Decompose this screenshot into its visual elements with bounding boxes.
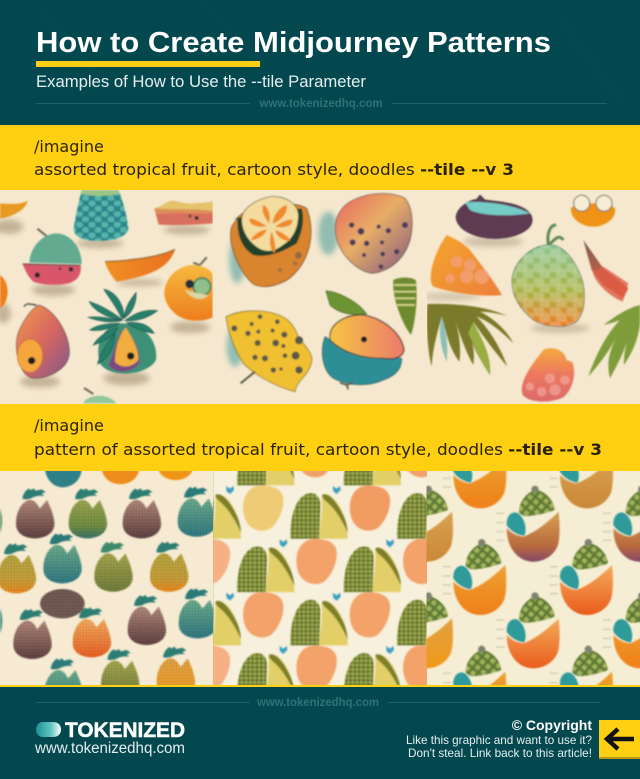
copyright note: Like this graphic and want to use it? bbox=[406, 733, 592, 747]
prompt band 2: /imagine bbox=[34, 416, 104, 435]
image row 1: tropical fruit doodles bbox=[0, 190, 640, 404]
footer band bbox=[0, 685, 640, 779]
prompt band 1: assorted tropical fruit, cartoon style, doodles --tile --v 3 bbox=[34, 160, 514, 179]
pattern 2 bbox=[213, 471, 427, 685]
website label bottom: www.tokenizedhq.com bbox=[256, 697, 379, 709]
website label top: www.tokenizedhq.com bbox=[259, 98, 382, 110]
mottled round fruit bbox=[335, 194, 412, 273]
copyright note bbox=[406, 717, 592, 760]
image 1 bbox=[0, 190, 213, 403]
prompt band 2: pattern of assorted tropical fruit, cartoon style, doodles --tile --v 3 bbox=[34, 440, 602, 459]
logo: TOKENIZED bbox=[65, 719, 185, 742]
logo: www.tokenizedhq.com bbox=[34, 740, 185, 757]
title: How to Create Midjourney Patterns bbox=[36, 27, 551, 59]
image row 2: tropical fruit patterns bbox=[0, 471, 640, 685]
title underline bbox=[36, 61, 260, 67]
pattern 3 bbox=[426, 471, 640, 685]
subtitle: Examples of How to Use the --tile Parameter bbox=[36, 72, 366, 91]
logo bbox=[34, 719, 185, 757]
pattern 1 bbox=[0, 471, 213, 685]
copyright note: Don't steal. Link back to this article! bbox=[408, 746, 592, 760]
prompt band 1: /imagine bbox=[34, 137, 104, 156]
copyright note: © Copyright bbox=[512, 717, 592, 733]
image 2 bbox=[226, 194, 417, 392]
image 3 bbox=[420, 195, 640, 402]
prompt band 2 bbox=[0, 404, 640, 471]
icon: back arrow bbox=[599, 720, 640, 759]
prompt band 1 bbox=[0, 125, 640, 190]
header band bbox=[0, 0, 640, 125]
